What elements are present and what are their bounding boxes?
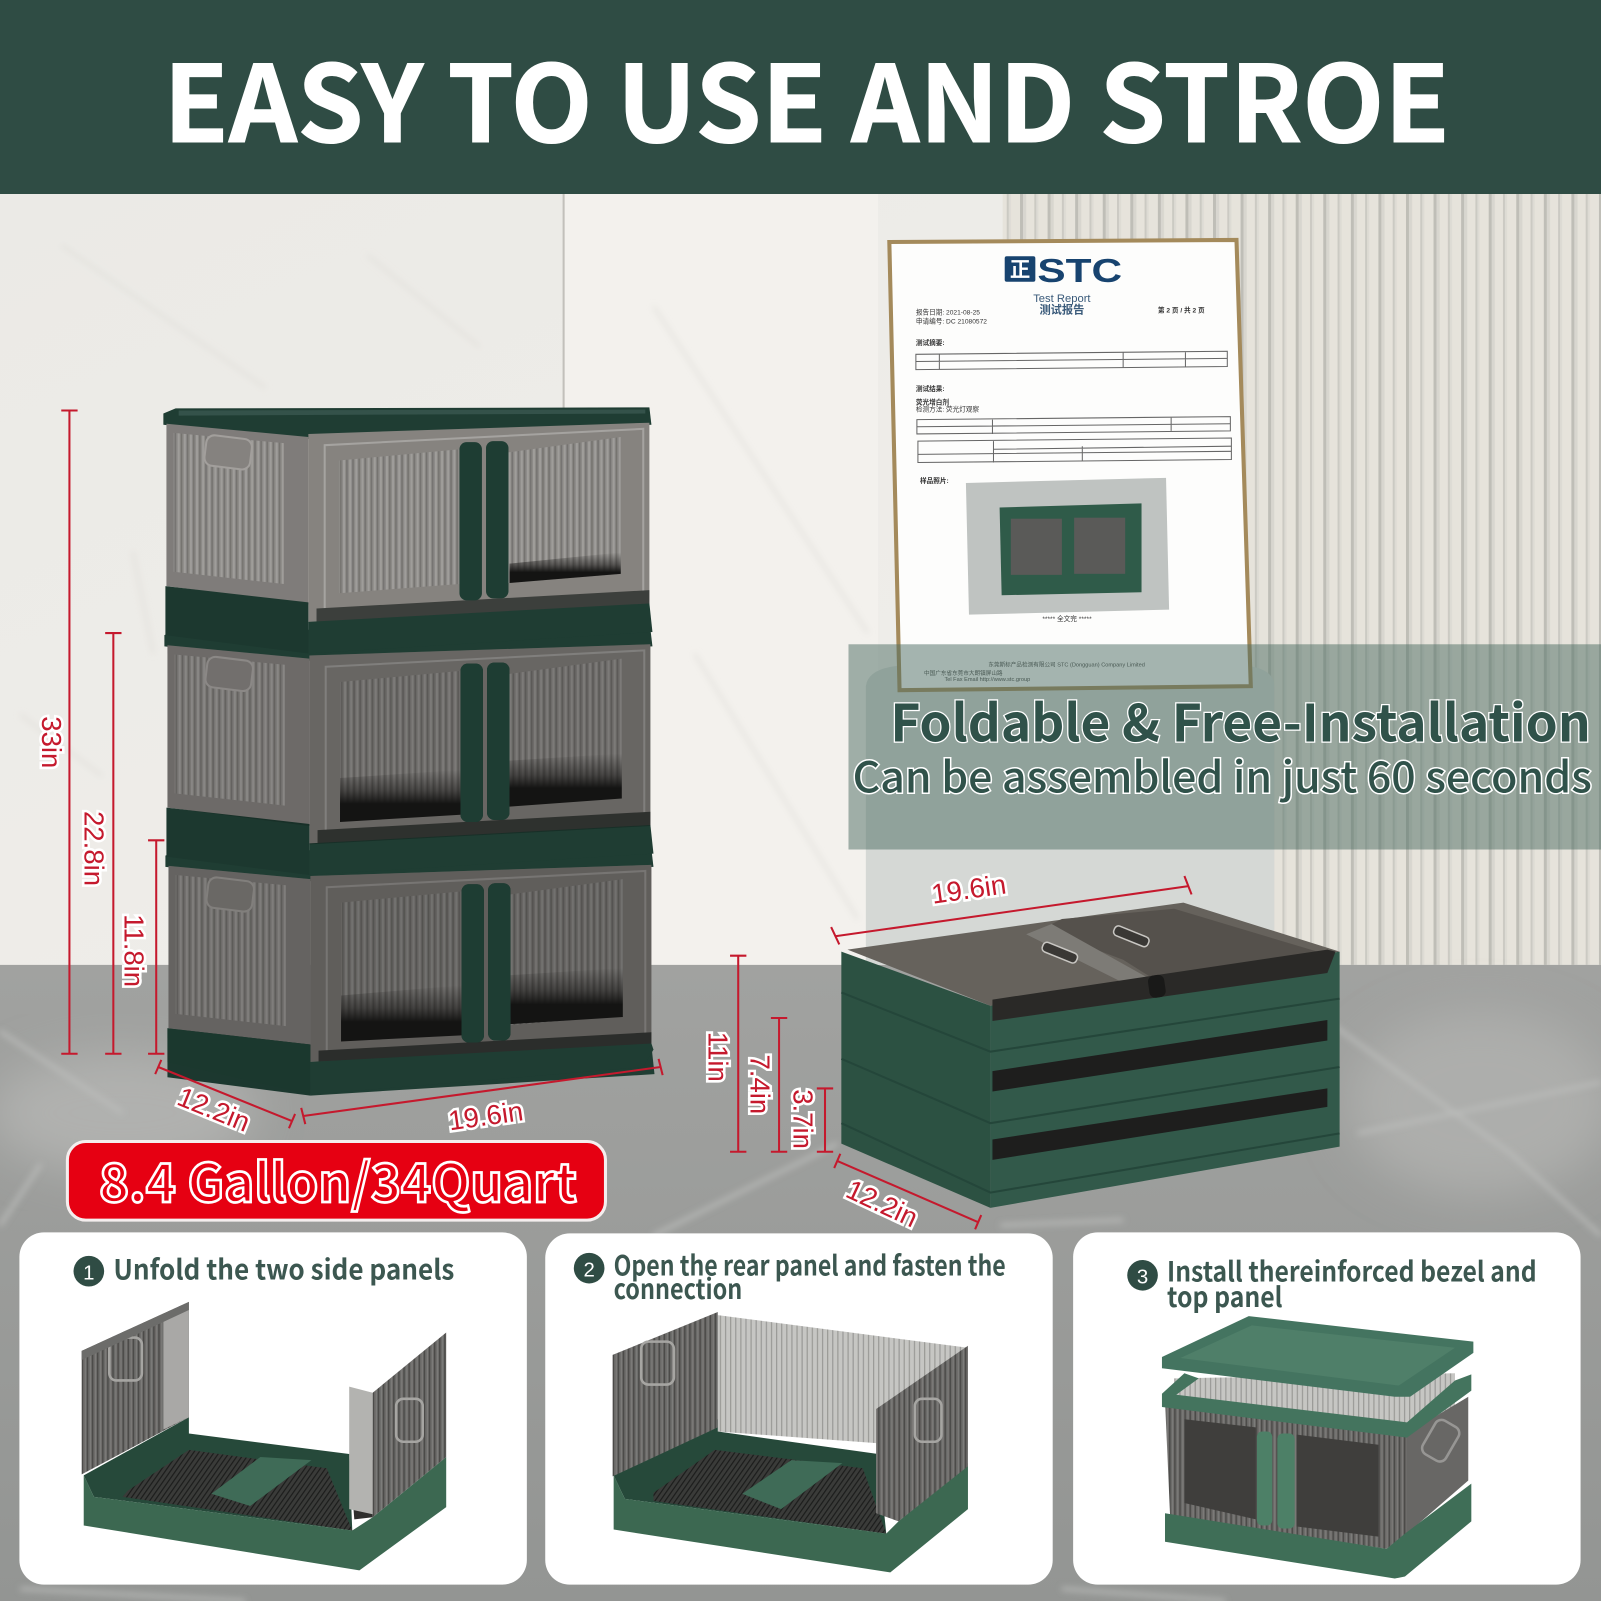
height 7.4in: 7.4in (744, 1054, 775, 1114)
height 11in: 11in (703, 1032, 734, 1082)
step 3 illustration (1162, 1316, 1473, 1579)
step 2 text: Open the rear panel and fasten the (614, 1243, 1006, 1283)
report title (1033, 293, 1091, 316)
depth 12.2in: 12.2in (842, 1173, 923, 1233)
title banner: EASY TO USE AND STROE (163, 19, 1450, 173)
middle box (164, 629, 653, 875)
folded boxes (841, 903, 1340, 1208)
caption band (848, 644, 1601, 850)
step 1 number: 1 (83, 1262, 95, 1284)
dimensions: folded boxes (703, 869, 1192, 1233)
ribbed wall panel (1003, 194, 1601, 965)
height 11in (703, 956, 746, 1152)
step 1 text: Unfold the two side panels (113, 1247, 454, 1287)
certificate footer: 中国广东省东莞市大朗镇屏山路 (924, 669, 1003, 677)
width 19.6in (301, 1059, 663, 1136)
stacked storage boxes (163, 407, 654, 1096)
framed test certificate (889, 240, 1251, 690)
step 3 number: 3 (1137, 1266, 1148, 1288)
report text: 测试摘要: (916, 338, 945, 347)
report title: 测试报告 (1039, 302, 1084, 316)
report text: 检测方法: 荧光灯观察 (916, 404, 980, 413)
height 3.7in (787, 1088, 833, 1152)
top box (163, 407, 652, 653)
background wall (0, 194, 1601, 970)
step 2 number (574, 1253, 604, 1283)
heading: foldable and free installation: Foldable & Free-Installation (890, 682, 1591, 756)
step 2 number: 2 (583, 1259, 595, 1281)
dimensions: stacked boxes (36, 410, 663, 1138)
subheading: Can be assembled in just 60 seconds (853, 743, 1592, 805)
depth 12.2in: 12.2in (173, 1081, 254, 1138)
certificate footer (924, 661, 1145, 683)
step 2 text: connection (614, 1267, 742, 1307)
depth 12.2in (834, 1154, 981, 1233)
report text: 测试结果: (916, 384, 945, 393)
step 3 text (1167, 1249, 1537, 1315)
title banner (0, 0, 1601, 194)
folded front (990, 952, 1340, 1208)
folded slots (992, 1020, 1327, 1091)
panel: step 1 (19, 1232, 527, 1585)
report title: Test Report (1033, 293, 1091, 305)
report text: ***** 全文完 ***** (1042, 614, 1092, 623)
certificate footer: Tel Fax Email http://www.stc.group (944, 677, 1030, 683)
width 19.6in: 19.6in (446, 1095, 525, 1136)
report text: 申请编号: DC 21080572 (916, 317, 987, 326)
floor (0, 965, 1601, 1601)
certificate footer: 东莞斯标产品检测有限公司 STC (Dongguan) Company Limited (988, 661, 1145, 669)
report text: 第 2 页 / 共 2 页 (1158, 305, 1205, 314)
height 22.8in (79, 633, 122, 1054)
depth 12.2in (155, 1060, 295, 1138)
bottom box (165, 850, 654, 1096)
step 1 number (74, 1256, 104, 1287)
heading: foldable and free installation (853, 682, 1592, 805)
step 3 number (1127, 1260, 1158, 1291)
height 11.8in: 11.8in (119, 914, 150, 987)
STC logo: 正 (1010, 260, 1030, 282)
pedestal (866, 666, 1274, 965)
panel: step 2 (545, 1233, 1053, 1585)
height 3.7in: 3.7in (787, 1089, 818, 1149)
capacity badge: 8.4 Gallon/34Quart (99, 1141, 577, 1218)
report tables (916, 351, 1231, 463)
report text: 荧光增白剂 (916, 397, 949, 406)
width 19.6in: 19.6in (929, 869, 1008, 910)
report text (916, 305, 1205, 623)
step 3 text: top panel (1167, 1275, 1283, 1315)
folded side (841, 952, 990, 1208)
step 2 illustration (613, 1312, 968, 1572)
step 1 illustration (82, 1302, 446, 1570)
height 11.8in (119, 840, 164, 1054)
height 22.8in: 22.8in (79, 811, 110, 886)
width 19.6in (831, 869, 1192, 944)
report text: 报告日期: 2021-08-25 (916, 307, 980, 316)
height 33in: 33in (36, 716, 67, 768)
translucent lid (847, 903, 1340, 1021)
STC logo (1005, 253, 1122, 290)
panel: step 3 (1073, 1232, 1581, 1585)
STC logo: STC (1037, 253, 1122, 290)
height 7.4in (744, 1018, 787, 1152)
height 33in (36, 410, 78, 1054)
step 2 text (614, 1243, 1006, 1307)
step 3 text: Install thereinforced bezel and (1167, 1249, 1537, 1289)
sample photo (966, 478, 1169, 615)
report text: 样品照片: (920, 476, 949, 485)
